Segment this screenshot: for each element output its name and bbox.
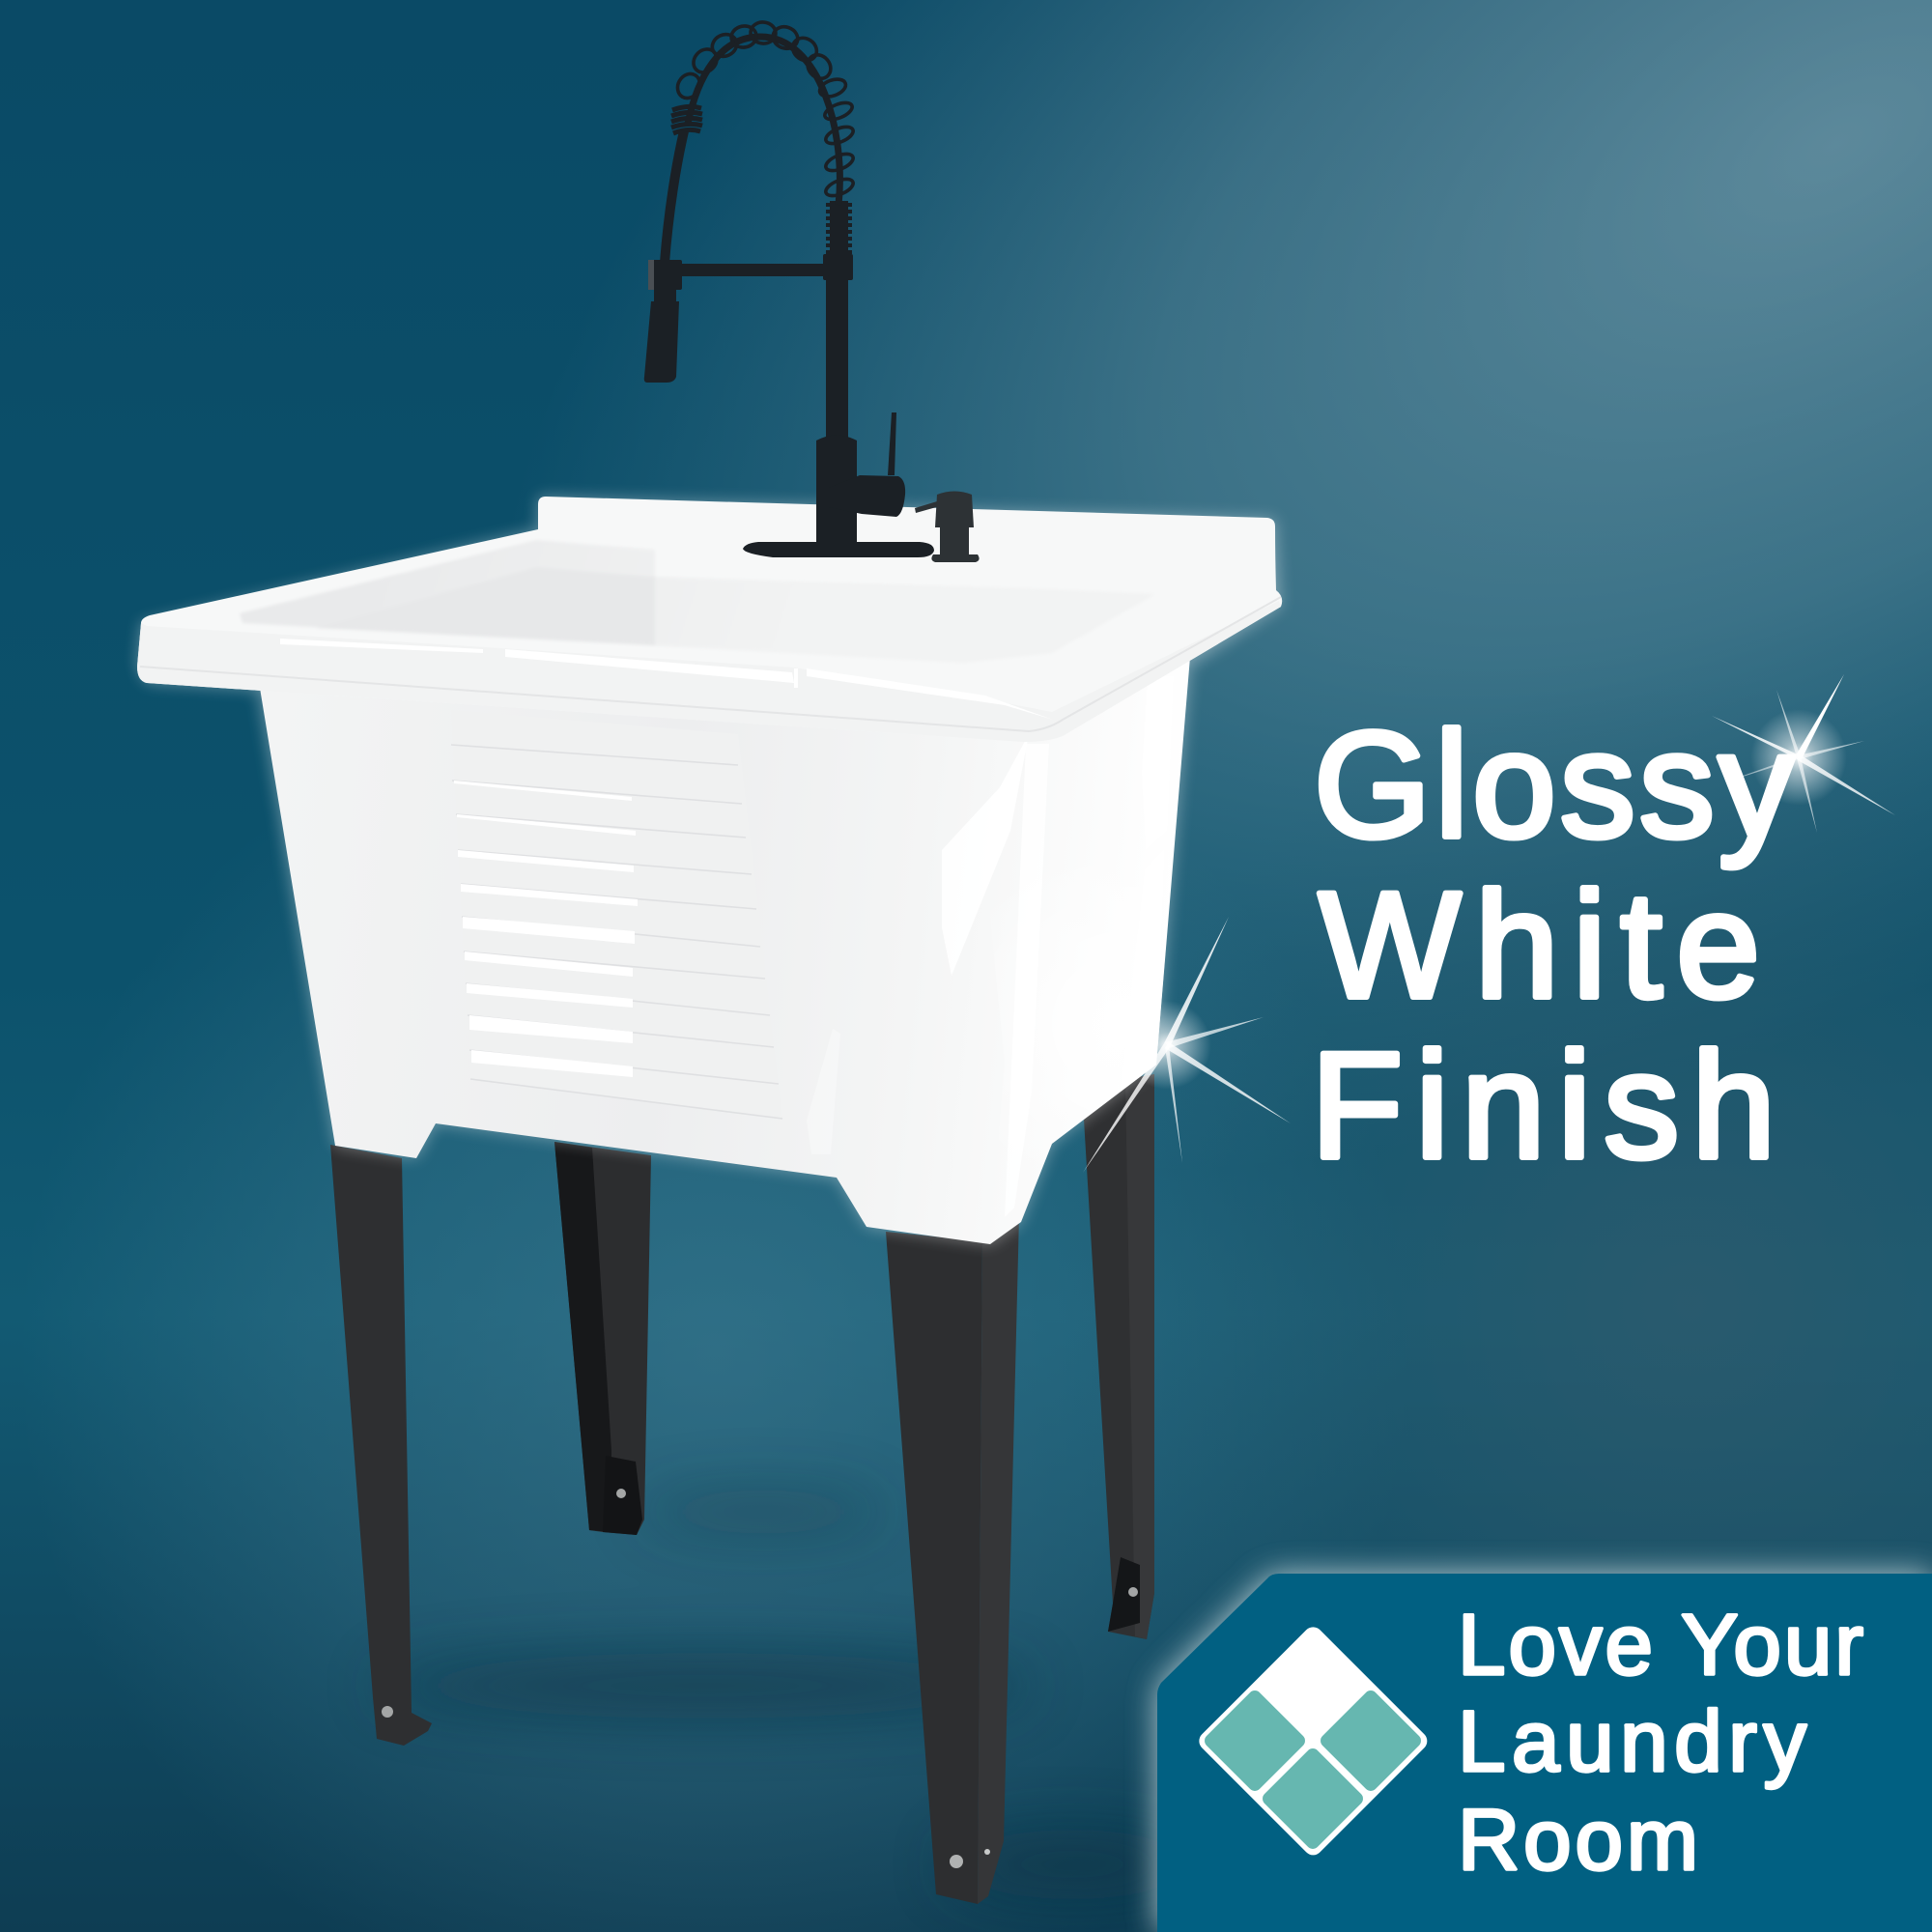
leg: back right xyxy=(1082,1074,1154,1639)
hose ribbed section xyxy=(671,106,702,133)
leg: back left xyxy=(554,1142,651,1535)
right side corner glow xyxy=(985,850,1174,1244)
floor shadows xyxy=(377,1487,1198,1899)
heading: Glossy White Finish: Finish xyxy=(1311,1022,1776,1190)
spring base xyxy=(826,201,852,255)
sparkle: on heading xyxy=(1712,674,1895,833)
washboard louvers xyxy=(451,710,782,1119)
spray hose xyxy=(665,131,684,263)
leg: front right xyxy=(886,1215,1019,1904)
glossy reflections xyxy=(807,676,1174,1217)
brand text: Laundry xyxy=(1458,1692,1806,1789)
basin xyxy=(240,540,1155,663)
badge shape xyxy=(1157,1574,1932,1932)
soap dispenser xyxy=(915,491,980,562)
sink tub xyxy=(137,497,1282,1244)
brand text: Room xyxy=(1458,1791,1698,1888)
spring coil arch xyxy=(673,21,856,205)
rim highlights xyxy=(280,639,1053,720)
faucet column xyxy=(816,254,857,548)
table legs xyxy=(330,1074,1154,1904)
badge panel: brand logo xyxy=(1157,1574,1932,1932)
leg: front left xyxy=(330,1145,432,1746)
rim front lip xyxy=(137,601,1281,742)
sparkle: on sink corner xyxy=(1083,917,1291,1173)
brand text: Love Your xyxy=(1458,1596,1863,1692)
heading: Glossy White Finish: White xyxy=(1319,862,1760,1030)
lip shading line xyxy=(140,597,1281,731)
spray head xyxy=(644,260,682,383)
heading: Glossy White Finish: Glossy xyxy=(1314,701,1794,869)
tub rim xyxy=(137,497,1282,742)
faucet xyxy=(644,21,934,557)
badge glow xyxy=(1157,1574,1932,1932)
faucet handle xyxy=(829,412,905,517)
faucet deck plate xyxy=(743,542,934,557)
soft glow around tub xyxy=(137,497,1281,1244)
heading: Glossy White Finish xyxy=(1311,701,1794,1190)
tub body xyxy=(258,657,1190,1244)
crossbar xyxy=(676,264,829,276)
brand text xyxy=(1458,1596,1863,1888)
icon: diamond logo xyxy=(1195,1623,1431,1859)
